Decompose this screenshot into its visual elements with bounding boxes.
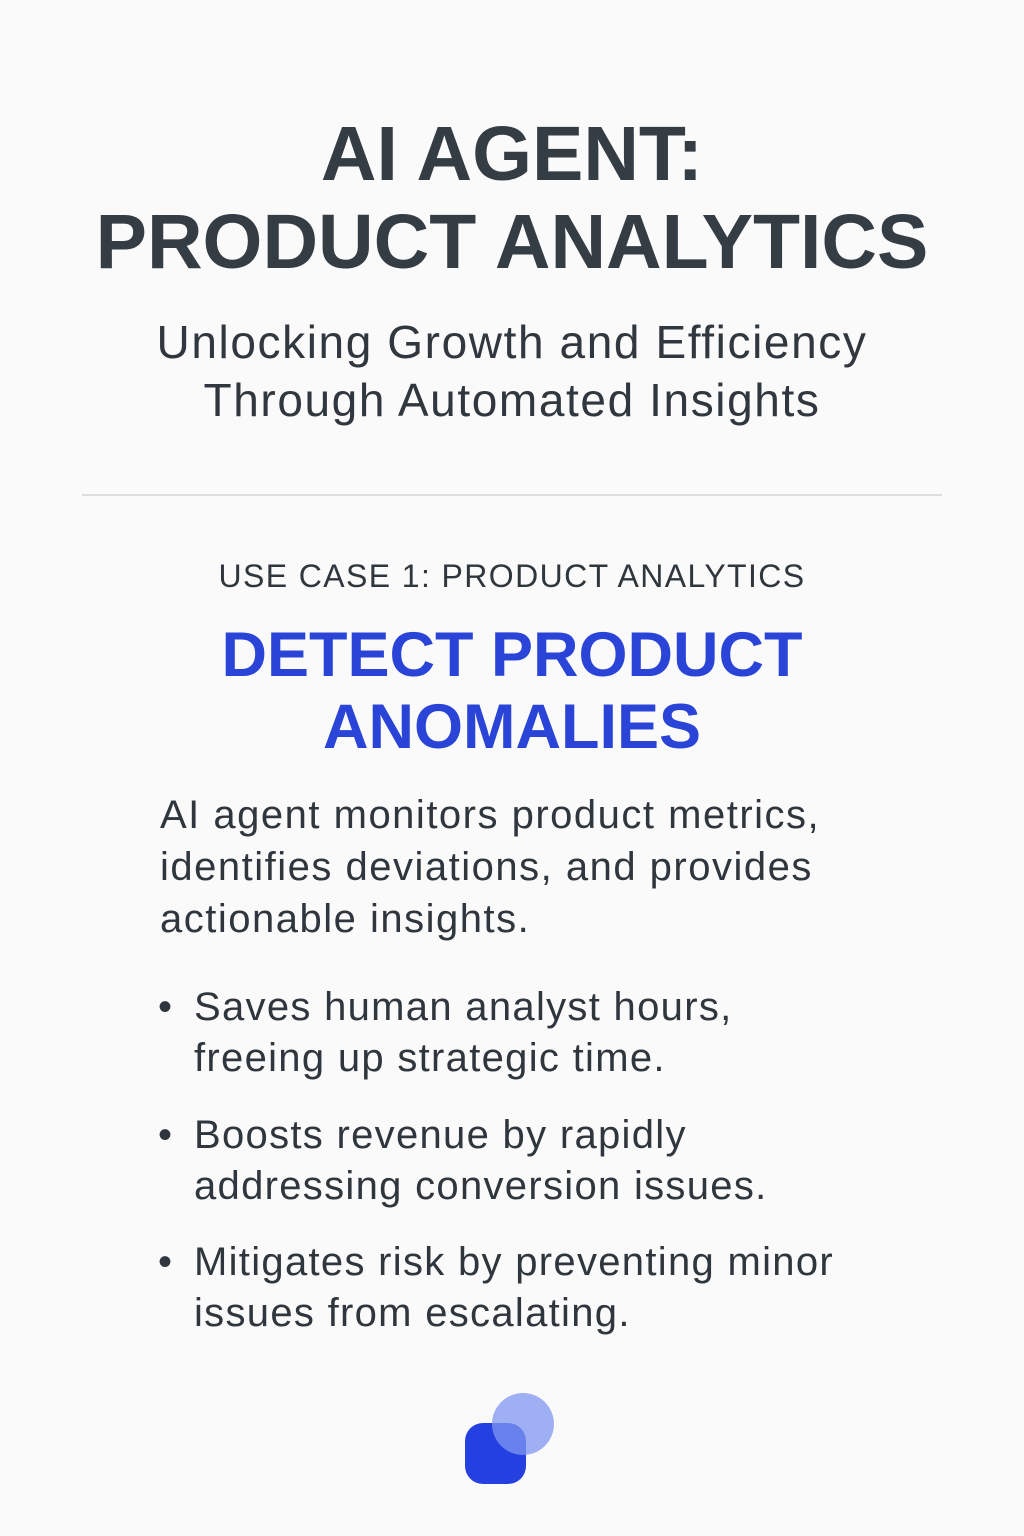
description: identifies deviations, and provides: [160, 845, 813, 889]
heading: [222, 620, 802, 762]
title: [96, 111, 928, 285]
bullet 1: freeing up strategic time.: [194, 1036, 666, 1080]
subtitle: Through Automated Insights: [204, 374, 820, 426]
icon: logo: [465, 1393, 554, 1484]
use case label: USE CASE 1: PRODUCT ANALYTICS: [218, 558, 806, 594]
bullet 3: Mitigates risk by preventing minor: [194, 1240, 834, 1284]
bullet 2: Boosts revenue by rapidly: [194, 1113, 687, 1157]
bullet 3: •: [158, 1240, 173, 1284]
bullet 2: •: [158, 1113, 173, 1157]
bullet 1: •: [158, 985, 173, 1029]
title: PRODUCT ANALYTICS: [96, 199, 928, 285]
bullet 1: [158, 985, 733, 1080]
title: AI AGENT:: [321, 111, 703, 197]
heading: DETECT PRODUCT: [222, 620, 802, 690]
bullet 2: [158, 1113, 768, 1208]
subtitle: [157, 316, 867, 426]
bullet 3: [158, 1240, 834, 1335]
description: AI agent monitors product metrics,: [160, 793, 820, 837]
bullet 1: Saves human analyst hours,: [194, 985, 733, 1029]
bullet 2: addressing conversion issues.: [194, 1164, 768, 1208]
subtitle: Unlocking Growth and Efficiency: [157, 316, 867, 368]
heading: ANOMALIES: [323, 692, 701, 762]
description: [160, 793, 820, 941]
description: actionable insights.: [160, 897, 530, 941]
bullet list: [158, 985, 834, 1335]
bullet 3: issues from escalating.: [194, 1291, 631, 1335]
